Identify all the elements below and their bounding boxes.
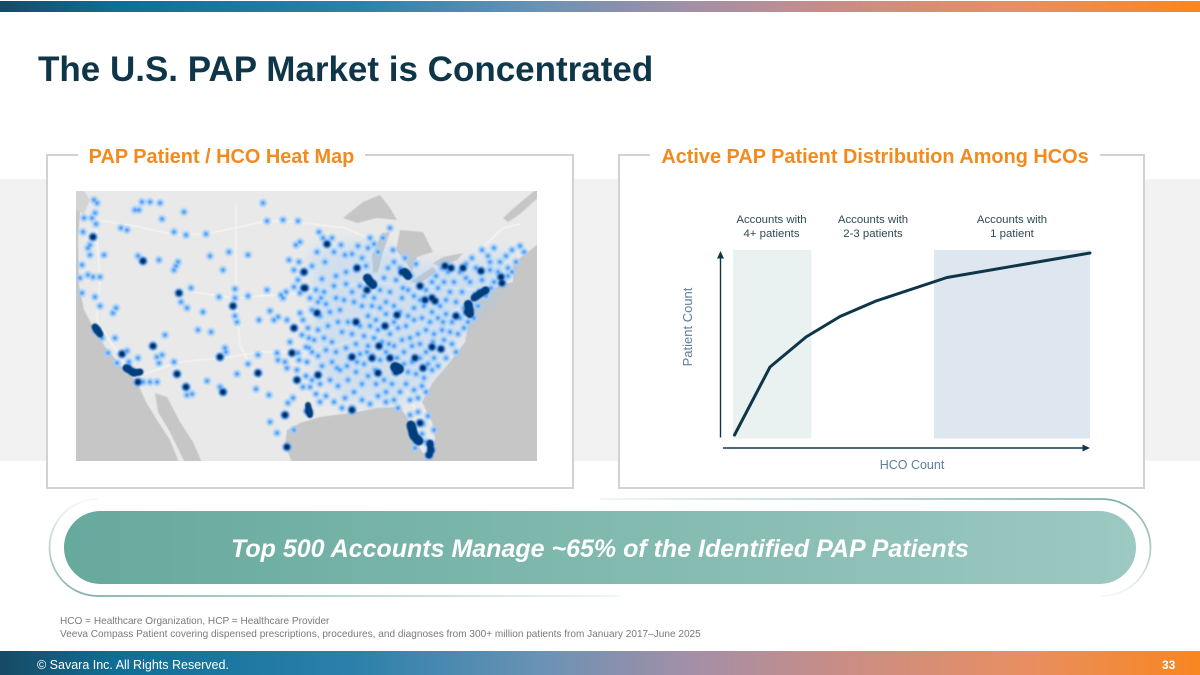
footnotes: HCO = Healthcare Organization, HCP = Healthcare Provider bbox=[60, 616, 329, 627]
ocean and lakes bbox=[70, 188, 540, 465]
heading: heat map: PAP Patient / HCO Heat Map bbox=[89, 146, 354, 168]
heading: distribution: Active PAP Patient Distribution Among HCOs bbox=[661, 146, 1089, 168]
x axis arrow bbox=[723, 447, 1084, 449]
roads and borders bbox=[96, 205, 520, 420]
callout outline bbox=[48, 498, 1152, 597]
footnotes: Veeva Compass Patient covering dispensed prescriptions, procedures, and diagnoses from 300+ million patients from January 2017–June 2025 bbox=[60, 629, 701, 640]
grey background band bbox=[0, 179, 1200, 461]
label: 2-3 patients: 2-3 patients bbox=[843, 228, 903, 240]
footnotes bbox=[60, 616, 701, 640]
dense metro clusters bbox=[95, 272, 486, 455]
heat map of U.S. bbox=[76, 191, 537, 461]
label: 4+ patients: 4+ patients bbox=[743, 228, 800, 240]
band: 4+ patients bbox=[733, 250, 812, 438]
label: 2-3 patients: Accounts with bbox=[838, 214, 908, 226]
page number: 33 bbox=[1162, 658, 1175, 672]
top gradient bar bbox=[0, 1, 1200, 12]
light blue density haze bbox=[310, 240, 510, 405]
callout pill: Top 500 Accounts Manage ~65% of the Identified PAP Patients bbox=[231, 535, 969, 563]
band: 1 patient bbox=[934, 250, 1090, 438]
chart: patient distribution curve bbox=[680, 214, 1092, 472]
title: The U.S. PAP Market is Concentrated bbox=[38, 50, 653, 89]
x axis label: HCO Count bbox=[880, 458, 945, 472]
label: 1 patient: 1 patient bbox=[990, 228, 1035, 240]
copyright: © Savara Inc. All Rights Reserved. bbox=[37, 658, 229, 672]
y axis label: Patient Count bbox=[680, 287, 695, 366]
y axis arrow bbox=[720, 258, 722, 438]
panel: distribution bbox=[618, 154, 1145, 489]
label: 4+ patients: Accounts with bbox=[736, 214, 807, 226]
patient density dots bbox=[80, 200, 524, 455]
callout pill bbox=[64, 511, 1136, 584]
curve bbox=[734, 253, 1090, 435]
panel: heat map bbox=[46, 154, 574, 489]
label: 1 patient: Accounts with bbox=[977, 214, 1047, 226]
land bbox=[76, 191, 537, 461]
footer bar bbox=[0, 651, 1200, 675]
